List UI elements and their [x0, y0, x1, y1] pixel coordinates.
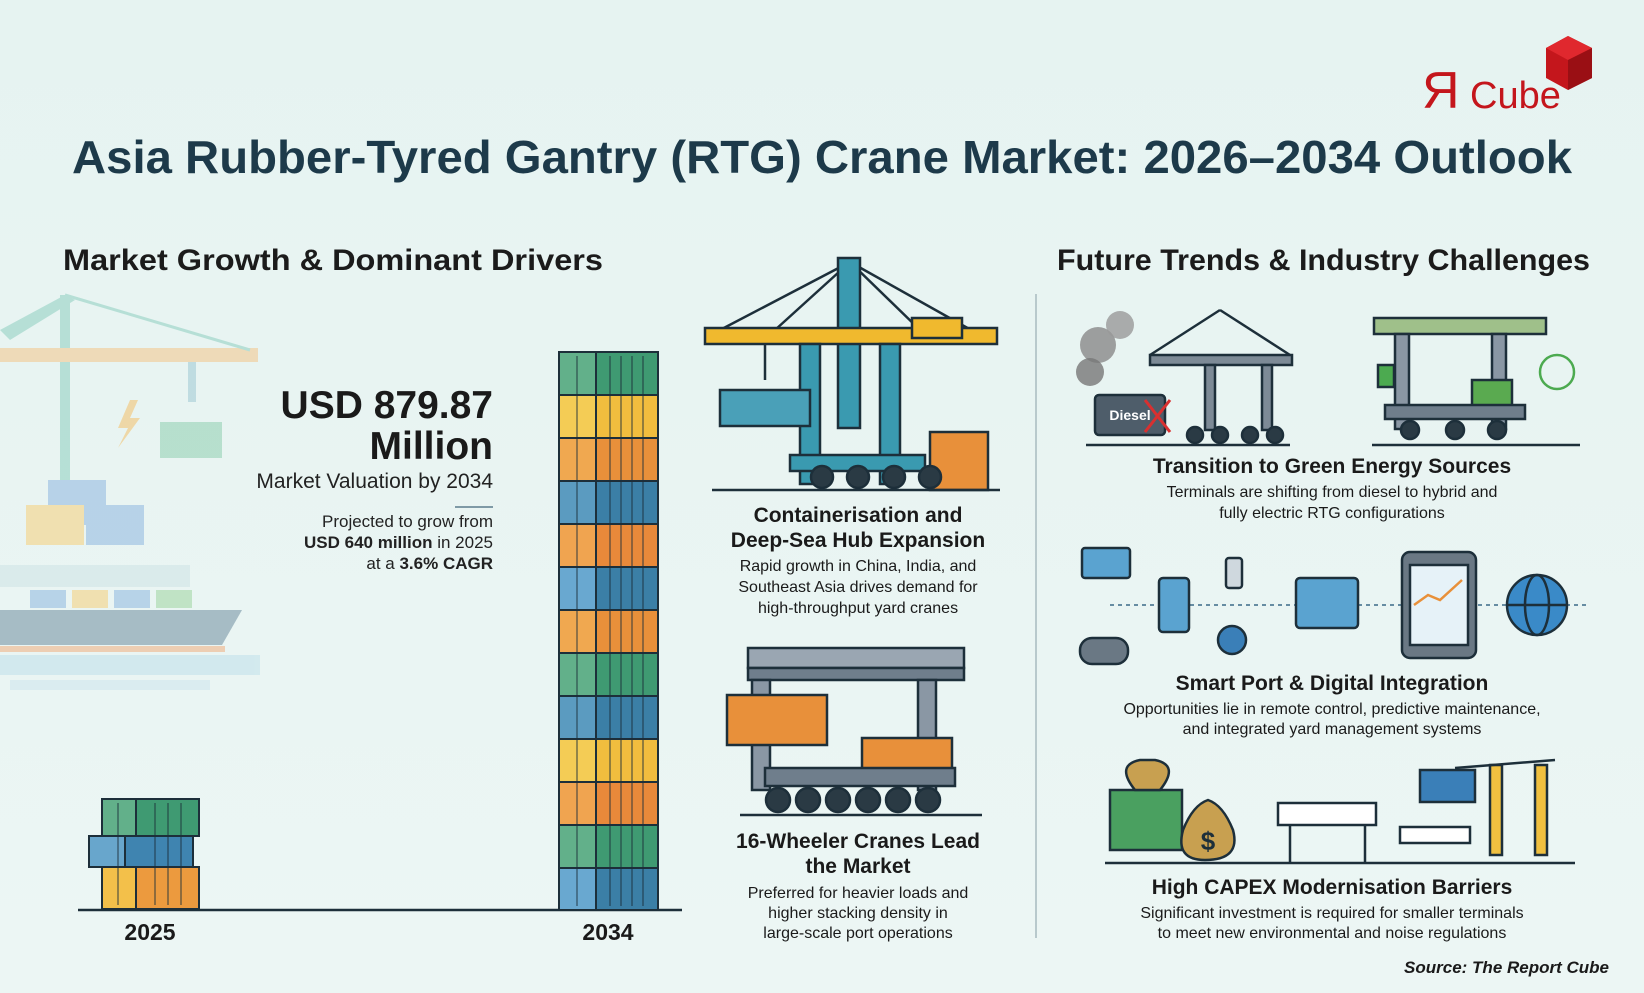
text: 16-wheeler: Preferred for heavier loads and: [748, 885, 968, 902]
value callout: Projected to grow from: [322, 512, 493, 531]
icon: diesel vs electric: [1076, 310, 1580, 445]
icon: ship-to-shore crane: [705, 258, 1000, 490]
text: containerisation: high-throughput yard cranes: [758, 600, 958, 617]
icon: CAPEX barriers: $: [1201, 826, 1216, 856]
heading: left: Market Growth & Dominant Drivers: [63, 244, 603, 277]
text: containerisation: [731, 504, 985, 617]
text: CAPEX: to meet new environmental and noise regulations: [1158, 925, 1506, 942]
axis labels: 2025: [124, 919, 176, 945]
value callout: [256, 384, 493, 573]
text: containerisation: Rapid growth in China, India, and: [740, 558, 976, 575]
source: Source: The Report Cube: [1404, 958, 1609, 977]
bar chart: container stacks: [78, 352, 682, 945]
text: green energy: fully electric RTG configurations: [1219, 505, 1445, 522]
title: Asia Rubber-Tyred Gantry (RTG) Crane Market: 2026–2034 Outlook: [72, 131, 1572, 183]
text: smart port: and integrated yard management systems: [1183, 721, 1481, 738]
text: 16-wheeler: large-scale port operations: [763, 925, 953, 942]
value callout: at a 3.6% CAGR: [366, 554, 493, 573]
text: containerisation: Deep-Sea Hub Expansion: [731, 529, 985, 552]
heading: right: Future Trends & Industry Challenges: [1057, 244, 1590, 277]
text: CAPEX: High CAPEX Modernisation Barriers: [1152, 876, 1512, 899]
text: smart port: Smart Port & Digital Integration: [1176, 672, 1488, 695]
icon: smart port network: [1080, 548, 1590, 664]
bar chart: container stacks: 2034: [582, 919, 634, 945]
text: 16-wheeler: the Market: [805, 855, 911, 878]
text: green energy: Terminals are shifting from diesel to hybrid and: [1167, 484, 1497, 501]
text: containerisation: Containerisation and: [754, 504, 962, 527]
value callout: Million: [370, 425, 493, 468]
text: green energy: Transition to Green Energy Sources: [1153, 455, 1511, 478]
faded port illustration: [0, 295, 260, 690]
icon: 16-wheeler RTG crane: [727, 648, 982, 815]
value callout: USD 879.87: [281, 384, 493, 427]
text: CAPEX: Significant investment is required for smaller terminals: [1140, 905, 1524, 922]
logo: [1422, 36, 1592, 120]
text: 16-wheeler: 16-Wheeler Cranes Lead: [736, 830, 980, 853]
value callout: Market Valuation by 2034: [256, 470, 493, 493]
text: 16-wheeler: higher stacking density in: [768, 905, 948, 922]
text: smart port: Opportunities lie in remote control, predictive maintenance,: [1123, 701, 1541, 718]
2025 stack: [89, 799, 199, 909]
text: smart port: [1123, 672, 1541, 738]
logo: Я: [1422, 62, 1460, 120]
icon: CAPEX barriers: [1105, 760, 1575, 863]
text: 16-wheeler: [736, 830, 980, 942]
text: containerisation: Southeast Asia drives demand for: [738, 579, 978, 596]
icon: diesel vs electric: Diesel: [1109, 407, 1151, 423]
value callout: USD 640 million in 2025: [304, 533, 493, 552]
2034 stack: [559, 352, 658, 910]
logo: Cube: [1470, 75, 1561, 117]
text: green energy: [1153, 455, 1511, 522]
text: CAPEX: [1140, 876, 1524, 942]
